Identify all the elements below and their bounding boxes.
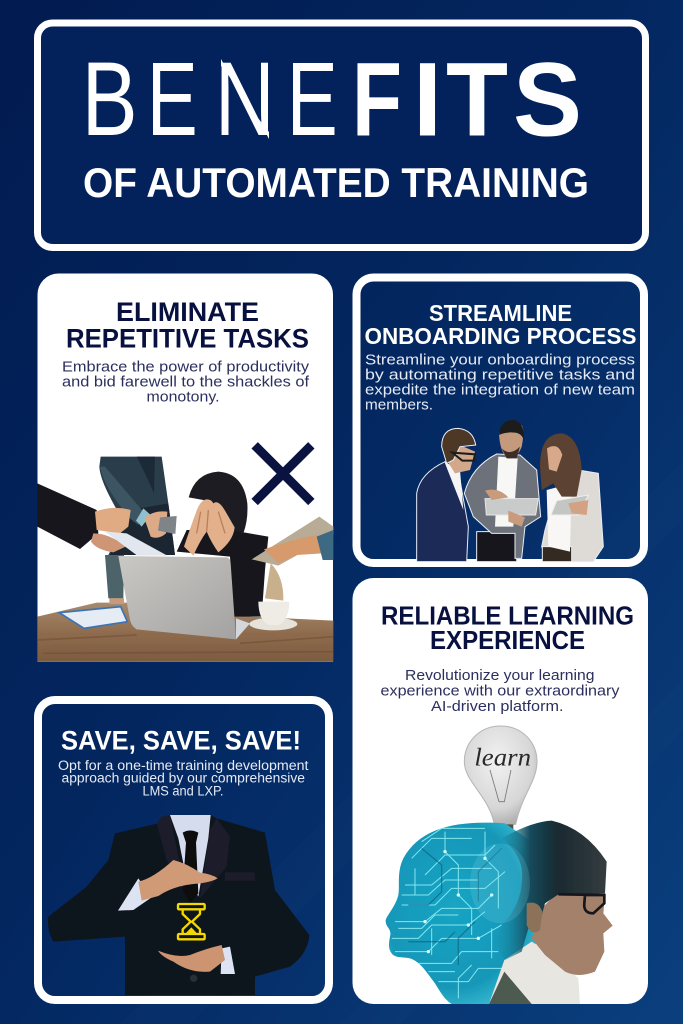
worried woman [177,472,268,617]
subtitle: OF AUTOMATED TRAINING [83,159,589,206]
icon: cross [255,445,311,502]
heading [364,300,636,349]
body text [365,351,635,413]
body text: members. [365,396,433,413]
tie [183,830,198,903]
body text: and bid farewell to the shackles of [62,374,310,391]
heading: STREAMLINE [429,300,572,326]
heading: SAVE, SAVE, SAVE! [61,725,301,755]
heading: ELIMINATE [116,297,259,327]
coffee cup [249,602,297,630]
title: BENEFITS: E [147,41,198,158]
title: BENEFITS: N [215,41,275,158]
heading: ONBOARDING PROCESS [364,323,636,349]
heading [66,297,309,354]
arm from right with tablet [252,517,333,566]
panel: eliminate repetitive tasks [37,274,333,662]
heading [381,602,634,655]
jacket [48,815,309,995]
woman [542,470,603,562]
body text [58,758,309,798]
body text: Opt for a one-time training development [58,758,309,773]
photo: overwhelmed office worker [37,457,333,662]
title panel [38,23,646,248]
chair [265,563,283,601]
body text [62,359,310,406]
title: BENEFITS: B [82,41,138,158]
body text: approach guided by our comprehensive [62,771,305,786]
light bulb [464,726,537,830]
lower hand [221,947,235,974]
panel: save, save, save [38,700,329,1000]
table [37,603,333,662]
title: BENEFITS [82,41,582,158]
heading: REPETITIVE TASKS [66,324,309,354]
body text: experience with our extraordinary [380,683,620,700]
panel: streamline onboarding process [356,278,644,563]
body text: AI-driven platform. [431,698,564,715]
arm from left [37,483,98,549]
panel: reliable learning experience [352,578,648,1004]
glow circle [470,843,530,923]
heading: EXPERIENCE [430,627,585,655]
man in profile [489,821,613,1004]
body text [380,667,620,715]
photo: businessman with hourglass [48,815,309,995]
standing colleague [99,457,177,604]
shirt [170,815,211,897]
title: BENEFITS: F [352,42,402,158]
photo: three colleagues with tablets [417,420,603,562]
hourglass icon [178,904,205,939]
body text: LMS and LXP. [142,783,224,798]
title: BENEFITS: S [513,42,582,158]
body text: Streamline your onboarding process [365,351,635,368]
man in navy suit [417,462,468,562]
laptop [118,556,236,639]
title: BENEFITS: E [287,41,338,158]
body text: Embrace the power of productivity [62,359,310,376]
title: BENEFITS: I [413,42,442,158]
upper hand [118,878,152,911]
body text: monotony. [146,389,220,406]
man in grey suit [464,454,541,562]
body text: Revolutionize your learning [405,667,594,684]
title: BENEFITS: T [446,42,508,158]
bulb lettering: learn [474,744,531,772]
body text: expedite the integration of new team [365,381,635,398]
body text: by automating repetitive tasks and [365,366,635,383]
heading: RELIABLE LEARNING [381,602,634,630]
AI circuit head [386,823,538,1004]
clipboard [59,607,127,628]
illustration: light bulb and AI head [386,726,613,1004]
